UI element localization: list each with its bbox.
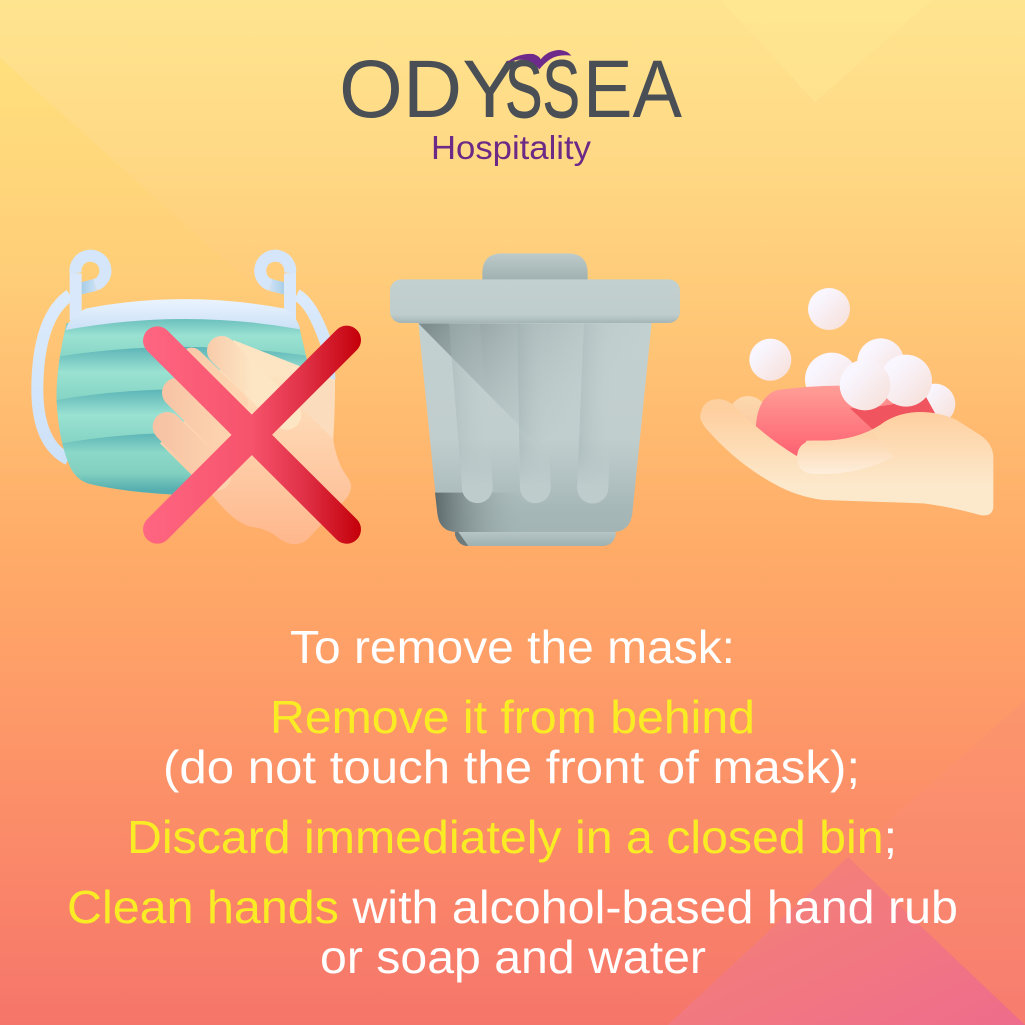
bin lid	[390, 279, 680, 323]
right hook	[260, 256, 290, 320]
bin foot	[455, 530, 616, 546]
foam bubbles front	[840, 355, 932, 410]
logo bird	[506, 50, 571, 69]
step 3: Clean hands with alcohol-based hand rub	[67, 881, 958, 933]
hand	[160, 340, 351, 544]
step 2: Discard immediately in a closed bin ;	[127, 811, 897, 863]
soap bar	[756, 386, 936, 458]
step 1 note: (do not touch the front of mask);	[163, 741, 860, 793]
bin grooves	[449, 323, 613, 504]
icon: mask with hand crossed out	[37, 256, 351, 544]
logo subtitle: Hospitality	[431, 129, 592, 166]
logo	[339, 44, 682, 166]
palm	[700, 399, 993, 515]
heading line: To remove the mask:	[290, 621, 735, 673]
left hook	[75, 256, 105, 320]
bin shading	[418, 323, 652, 443]
rear finger	[732, 396, 765, 433]
foam bubbles back	[749, 288, 955, 424]
step 3 continued: or soap and water	[320, 931, 706, 983]
mask top band	[66, 299, 300, 330]
icon: soap and foam on hand	[700, 288, 993, 515]
bin body	[418, 323, 652, 532]
bin knob	[482, 253, 588, 283]
logo wordmark: ODY	[339, 44, 517, 135]
right ear loop	[297, 295, 329, 380]
soap shade	[850, 395, 936, 430]
instructions text	[67, 621, 958, 983]
mask body	[56, 319, 307, 494]
left ear loop	[37, 295, 70, 459]
step 1: Remove it from behind	[270, 691, 755, 743]
thumb	[797, 431, 893, 474]
logo wordmark: EA	[583, 44, 682, 135]
red cross	[157, 340, 347, 529]
logo wordmark: SS	[505, 44, 580, 135]
icon: closed bin	[390, 253, 680, 546]
logo wordmark	[339, 44, 682, 135]
